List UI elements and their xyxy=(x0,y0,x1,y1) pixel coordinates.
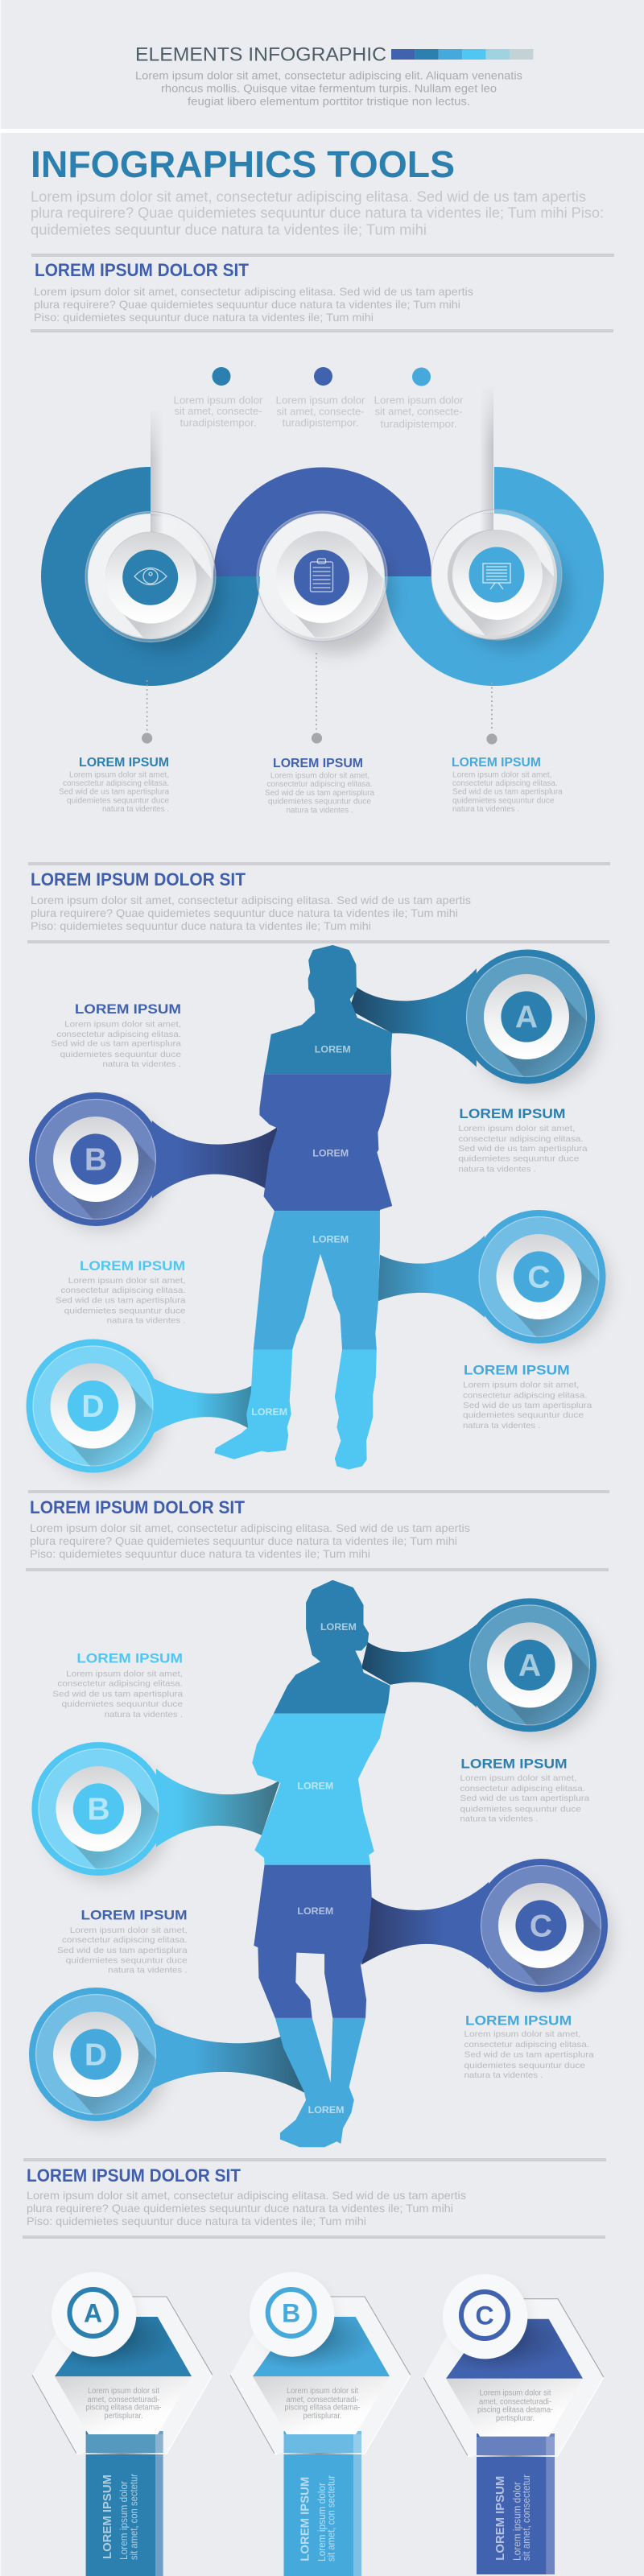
female silhouette: LOREM xyxy=(297,1781,333,1791)
label left: quidemietes sequuntur duce xyxy=(67,797,169,805)
wave band: left xyxy=(41,467,260,686)
badge A (man): A xyxy=(515,1001,538,1035)
hexagon card C xyxy=(423,2274,604,2574)
top legend dots and captions xyxy=(174,367,464,430)
section heading 1: Lorem ipsum dolor sit amet, consectetur adipiscing elitasa. Sed wid de us tam apertis xyxy=(34,285,473,298)
label right top: Lorem ipsum dolor sit amet, xyxy=(458,1125,575,1133)
top legend dots and captions: turadipistempor. xyxy=(282,417,359,428)
connectors: man xyxy=(148,968,485,1437)
label left lower: LOREM IPSUM xyxy=(80,1259,185,1274)
dotted leader lines xyxy=(142,653,497,745)
intro paragraph: Lorem ipsum dolor sit amet, consectetur adipiscing elitasa. Sed wid de us tam apertis xyxy=(31,188,586,204)
icon: clipboard xyxy=(311,559,333,592)
icon: eye xyxy=(134,568,167,584)
label left lower: consectetur adipiscing elitasa. xyxy=(61,1286,186,1295)
ribbon text B xyxy=(299,2475,336,2562)
section heading 1 xyxy=(34,260,473,324)
wave band: middle xyxy=(213,467,431,576)
ribbon text B: Lorem ipsum dolor xyxy=(316,2482,328,2562)
label left lower: Sed wid de us tam apertisplura xyxy=(57,1946,188,1955)
letter ring C: C xyxy=(475,2301,494,2330)
label centre: consectetur adipiscing elitasa. xyxy=(267,780,373,789)
label left upper: LOREM IPSUM xyxy=(76,1652,183,1666)
label right: quidemietes sequuntur duce xyxy=(452,797,555,805)
label A left: LOREM IPSUM xyxy=(75,1002,181,1017)
man labels xyxy=(51,1002,592,1430)
label right: LOREM IPSUM xyxy=(452,756,541,770)
intro paragraph xyxy=(31,188,604,238)
label right upper: consectetur adipiscing elitasa. xyxy=(460,1785,585,1794)
badge B (man) xyxy=(29,1092,163,1226)
header description: feugiat libero elementum porttitor tristique non lectus. xyxy=(188,95,470,108)
trapezoid A xyxy=(55,2317,192,2376)
top legend dots and captions: sit amet, consecte- xyxy=(277,406,364,417)
label centre: LOREM IPSUM xyxy=(273,757,363,770)
section heading 3: Lorem ipsum dolor sit amet, consectetur adipiscing elitasa. Sed wid de us tam apertis xyxy=(30,1521,470,1534)
section heading 2: Lorem ipsum dolor sit amet, consectetur adipiscing elitasa. Sed wid de us tam apertis xyxy=(31,894,471,906)
letter ring A: A xyxy=(84,2298,102,2327)
label centre xyxy=(265,757,374,815)
section heading 4: Lorem ipsum dolor sit amet, consectetur adipiscing elitasa. Sed wid de us tam apertis xyxy=(27,2189,466,2202)
top legend dots and captions: sit amet, consecte- xyxy=(375,406,462,417)
label right upper: Sed wid de us tam apertisplura xyxy=(460,1794,590,1803)
ribbon text C xyxy=(493,2474,532,2561)
vertical shadow strips xyxy=(151,387,493,531)
woman labels xyxy=(52,1652,594,2080)
section heading 2 xyxy=(31,869,471,932)
hexagon text B: Lorem ipsum dolor sit xyxy=(287,2387,358,2396)
hexagon card B xyxy=(230,2272,411,2576)
badge D (woman): D xyxy=(85,2038,107,2073)
label right top: Sed wid de us tam apertisplura xyxy=(458,1145,588,1154)
ribbon B xyxy=(275,2431,365,2576)
badge D (man) xyxy=(26,1340,159,1473)
section heading 2: Piso: quidemietes sequuntur duce natura ta videntes ile; Tum mihi xyxy=(31,919,371,932)
label left lower: natura ta videntes . xyxy=(107,1316,186,1325)
label right top: quidemietes sequuntur duce xyxy=(458,1154,580,1163)
female silhouette: LOREM xyxy=(320,1623,357,1633)
section heading 4 xyxy=(27,2165,466,2227)
header title: ELEMENTS INFOGRAPHIC xyxy=(135,43,386,66)
section heading 3: plura requirere? Quae quidemietes sequuntur duce natura ta videntes ile; Tum mihi xyxy=(30,1534,457,1547)
label right lower xyxy=(464,2014,594,2080)
header xyxy=(135,43,533,108)
label centre: quidemietes sequuntur duce xyxy=(268,798,371,807)
label left: Lorem ipsum dolor sit amet, xyxy=(69,771,169,779)
hexagon text B: amet, consecteturadi- xyxy=(287,2396,359,2405)
badge A (woman): A xyxy=(518,1649,541,1683)
letter ring A xyxy=(69,2289,116,2336)
hexagon text A: pertisplurar. xyxy=(105,2412,143,2421)
label right lower: natura ta videntes . xyxy=(463,1422,540,1430)
hexagon text A xyxy=(85,2387,161,2421)
section heading 3 xyxy=(30,1497,470,1560)
label centre: natura ta videntes . xyxy=(287,807,353,815)
hexagon text B: pertisplurar. xyxy=(303,2412,341,2421)
male silhouette: LOREM xyxy=(315,1045,351,1055)
label left upper: natura ta videntes . xyxy=(105,1711,183,1719)
ribbon text B: LOREM IPSUM xyxy=(299,2477,312,2562)
wave band: right xyxy=(385,467,604,686)
label right top: natura ta videntes . xyxy=(458,1166,536,1174)
badge C (man): C xyxy=(527,1261,551,1295)
hexagon text B: piscing elitasa detama- xyxy=(285,2404,361,2412)
hexagon text A: Lorem ipsum dolor sit xyxy=(88,2387,159,2396)
male silhouette: LOREM xyxy=(251,1407,287,1418)
top legend dots and captions: Lorem ipsum dolor xyxy=(374,394,464,406)
badge shadows: woman xyxy=(42,1612,613,2128)
ribbon C xyxy=(468,2434,558,2574)
label left upper xyxy=(52,1652,184,1719)
badge shadows: man xyxy=(39,963,610,1478)
male silhouette: LOREM xyxy=(312,1149,349,1159)
section heading 4: Piso: quidemietes sequuntur duce natura ta videntes ile; Tum mihi xyxy=(27,2215,366,2227)
label right top: LOREM IPSUM xyxy=(459,1107,566,1121)
hexagon card A xyxy=(32,2272,213,2576)
label right lower: natura ta videntes . xyxy=(464,2071,543,2080)
female silhouette xyxy=(252,1579,390,2148)
wave diagram xyxy=(41,367,604,815)
label left upper: Sed wid de us tam apertisplura xyxy=(52,1690,184,1699)
label right lower xyxy=(463,1364,592,1430)
section heading 4: plura requirere? Quae quidemietes sequuntur duce natura ta videntes ile; Tum mihi xyxy=(27,2202,453,2215)
label A left: Lorem ipsum dolor sit amet, xyxy=(64,1021,181,1030)
ribbon text C: Lorem ipsum dolor xyxy=(510,2481,523,2561)
trapezoid C xyxy=(446,2319,583,2379)
label right: consectetur adipiscing elitasa. xyxy=(452,779,558,788)
letter ring C xyxy=(461,2292,508,2339)
badge B (man): B xyxy=(85,1143,107,1178)
ribbon text B: sit amet, con sectetur xyxy=(325,2475,336,2562)
label right lower: LOREM IPSUM xyxy=(465,2014,572,2029)
node: eye xyxy=(85,512,224,652)
label right: Lorem ipsum dolor sit amet, xyxy=(452,771,552,779)
label left lower xyxy=(57,1909,188,1975)
ribbon text A: Lorem ipsum dolor xyxy=(118,2480,130,2560)
badge C (woman): C xyxy=(530,1909,552,1944)
label A left: consectetur adipiscing elitasa. xyxy=(56,1030,181,1039)
label right lower: Lorem ipsum dolor sit amet, xyxy=(463,1381,579,1389)
label A left: Sed wid de us tam apertisplura xyxy=(51,1039,181,1048)
label right top xyxy=(458,1107,588,1174)
section heading 3: Piso: quidemietes sequuntur duce natura ta videntes ile; Tum mihi xyxy=(30,1547,370,1560)
section heading 1: LOREM IPSUM DOLOR SIT xyxy=(35,260,250,280)
label right upper: quidemietes sequuntur duce xyxy=(460,1805,581,1814)
intro paragraph: plura requirere? Quae quidemietes sequuntur duce natura ta videntes ile; Tum mihi Piso: xyxy=(31,204,604,221)
label right lower: consectetur adipiscing elitasa. xyxy=(463,1392,588,1401)
section heading 1: plura requirere? Quae quidemietes sequuntur duce natura ta videntes ile; Tum mihi xyxy=(34,298,460,311)
label right lower: Sed wid de us tam apertisplura xyxy=(463,1402,592,1410)
label right xyxy=(452,756,563,814)
label left lower: Lorem ipsum dolor sit amet, xyxy=(68,1277,186,1286)
badge A (woman) xyxy=(463,1598,597,1732)
label right upper: natura ta videntes . xyxy=(460,1814,538,1824)
label left: LOREM IPSUM xyxy=(79,756,169,770)
label right: Sed wid de us tam apertisplura xyxy=(452,787,563,797)
label left: consectetur adipiscing elitasa. xyxy=(63,779,169,788)
label A left xyxy=(51,1002,181,1069)
icon: presentation board xyxy=(483,564,510,589)
top legend dots and captions: sit amet, consecte- xyxy=(174,405,262,417)
hexagon text C xyxy=(477,2389,553,2423)
top legend dots and captions: turadipistempor. xyxy=(180,417,256,428)
header description: rhoncus mollis. Quisque vitae fermentum turpis. Nullam eget leo xyxy=(161,82,497,95)
badge C (man) xyxy=(472,1210,605,1344)
label left lower: quidemietes sequuntur duce xyxy=(64,1307,186,1316)
node: presentation board xyxy=(431,510,570,650)
label left upper: quidemietes sequuntur duce xyxy=(62,1700,184,1709)
label left lower: Lorem ipsum dolor sit amet, xyxy=(70,1926,188,1935)
hexagon text C: pertisplurar. xyxy=(496,2414,535,2423)
label right upper: Lorem ipsum dolor sit amet, xyxy=(460,1774,576,1783)
badge B (woman): B xyxy=(87,1793,109,1827)
label left upper: consectetur adipiscing elitasa. xyxy=(57,1679,183,1689)
label right lower: consectetur adipiscing elitasa. xyxy=(464,2041,589,2050)
hexagon text C: piscing elitasa detama- xyxy=(477,2405,553,2415)
ribbon text A: sit amet, con sectetur xyxy=(127,2473,140,2560)
label left: natura ta videntes . xyxy=(102,805,169,814)
female silhouette: LOREM xyxy=(297,1907,333,1917)
label left xyxy=(59,756,169,814)
label A left: quidemietes sequuntur duce xyxy=(60,1051,181,1059)
letter ring B: B xyxy=(282,2298,300,2327)
label A left: natura ta videntes . xyxy=(103,1060,181,1069)
hexagon text A: amet, consecteturadi- xyxy=(87,2396,159,2405)
trapezoid B xyxy=(253,2317,390,2376)
label right lower: quidemietes sequuntur duce xyxy=(464,2062,586,2070)
intro paragraph: quidemietes sequuntur duce natura ta videntes ile; Tum mihi xyxy=(31,222,427,238)
section heading 2: LOREM IPSUM DOLOR SIT xyxy=(31,869,246,890)
female silhouette: LOREM xyxy=(308,2106,345,2116)
label right lower: Lorem ipsum dolor sit amet, xyxy=(464,2030,580,2039)
ribbon text C: sit amet, consectetur xyxy=(520,2474,532,2561)
hexagon text C: amet, consecteturadi- xyxy=(479,2397,551,2407)
ribbon text C: LOREM IPSUM xyxy=(493,2476,507,2561)
label centre: Sed wid de us tam apertisplura xyxy=(265,789,374,798)
ribbon text A xyxy=(101,2473,140,2560)
label right upper: LOREM IPSUM xyxy=(460,1757,568,1771)
hexagon text A: piscing elitasa detama- xyxy=(85,2404,161,2412)
label right top: consectetur adipiscing elitasa. xyxy=(458,1135,583,1144)
hexagon text B xyxy=(285,2387,361,2421)
section heading 4: LOREM IPSUM DOLOR SIT xyxy=(27,2165,242,2186)
header description xyxy=(135,69,522,108)
label right: natura ta videntes . xyxy=(452,805,519,814)
hexagon text C: Lorem ipsum dolor sit xyxy=(480,2389,551,2398)
label left upper: Lorem ipsum dolor sit amet, xyxy=(66,1670,183,1679)
ribbon text A: LOREM IPSUM xyxy=(101,2475,114,2559)
ribbon A xyxy=(76,2431,167,2576)
label left lower: LOREM IPSUM xyxy=(81,1909,188,1923)
connectors: woman xyxy=(148,1624,489,2094)
label left lower: natura ta videntes . xyxy=(108,1966,188,1975)
section heading 3: LOREM IPSUM DOLOR SIT xyxy=(30,1497,246,1517)
badge B (woman) xyxy=(31,1742,165,1876)
badge C (woman) xyxy=(474,1859,608,1992)
badge A (man) xyxy=(460,950,595,1084)
label right lower: quidemietes sequuntur duce xyxy=(463,1411,584,1420)
label left: Sed wid de us tam apertisplura xyxy=(59,787,169,797)
section heading 2: plura requirere? Quae quidemietes sequuntur duce natura ta videntes ile; Tum mihi xyxy=(31,906,458,919)
label left lower: consectetur adipiscing elitasa. xyxy=(62,1936,188,1945)
badge D (man): D xyxy=(81,1389,105,1424)
label centre: Lorem ipsum dolor sit amet, xyxy=(270,771,369,781)
top legend dots and captions: Lorem ipsum dolor xyxy=(275,394,365,406)
label right lower: Sed wid de us tam apertisplura xyxy=(464,2050,594,2060)
label right lower: LOREM IPSUM xyxy=(464,1364,570,1378)
male silhouette: LOREM xyxy=(312,1234,349,1245)
letter ring B xyxy=(268,2289,315,2336)
label left lower: quidemietes sequuntur duce xyxy=(66,1956,188,1966)
label right upper xyxy=(460,1757,590,1824)
header description: Lorem ipsum dolor sit amet, consectetur adipiscing elit. Aliquam venenatis xyxy=(135,69,522,82)
label left lower xyxy=(56,1259,186,1325)
male silhouette xyxy=(214,945,393,1470)
section heading 1: Piso: quidemietes sequuntur duce natura ta videntes ile; Tum mihi xyxy=(34,311,374,324)
badge D (woman) xyxy=(29,1988,163,2121)
node: clipboard xyxy=(257,511,394,654)
top legend dots and captions: Lorem ipsum dolor xyxy=(174,394,263,406)
top legend dots and captions: turadipistempor. xyxy=(380,418,457,430)
colour legend bar xyxy=(391,49,533,60)
main title: INFOGRAPHICS TOOLS xyxy=(31,143,455,185)
label left lower: Sed wid de us tam apertisplura xyxy=(56,1296,186,1305)
